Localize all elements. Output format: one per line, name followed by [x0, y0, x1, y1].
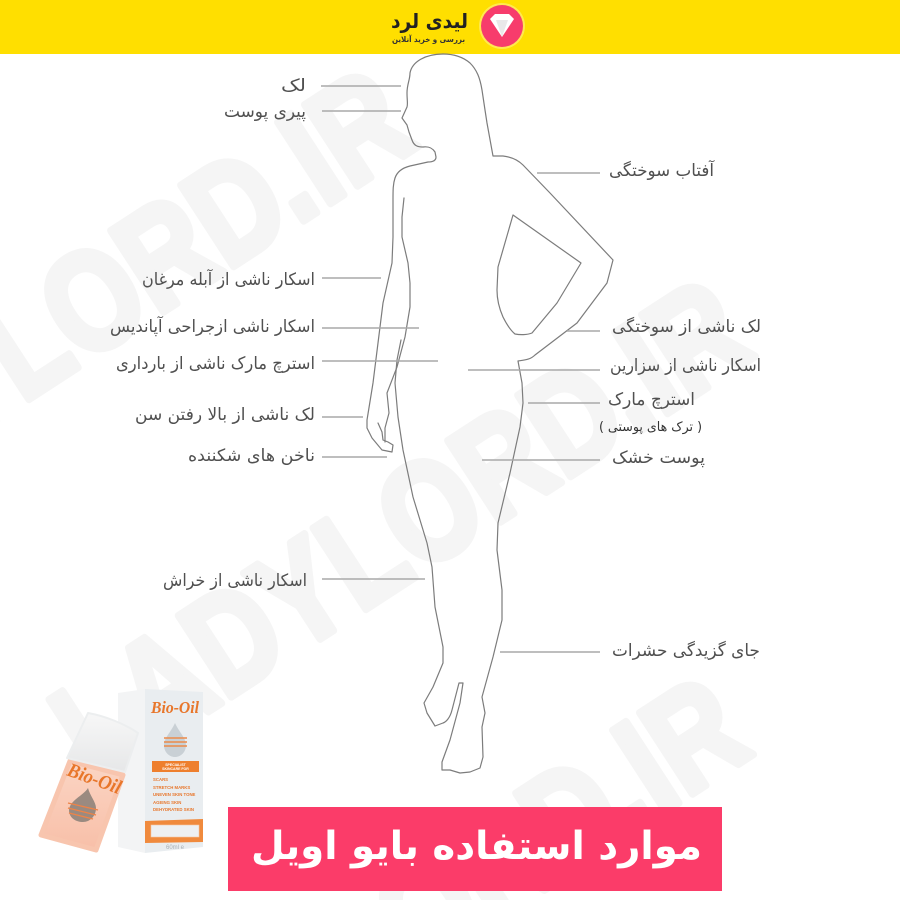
label: insect bites: جای گزیدگی حشرات: [612, 640, 760, 661]
label: scratch scars: اسکار ناشی از خراش: [163, 571, 307, 591]
product box: 60ml e: [166, 845, 185, 851]
label: skin cracks: ( ترک های پوستی ): [599, 420, 702, 435]
label: appendix surgery scars: اسکار ناشی ازجراحی آپاندیس: [110, 315, 315, 337]
label: brittle nails: ناخن های شکننده: [188, 446, 315, 466]
header logo icon: diamond in pink circle: [479, 3, 525, 49]
product bottle: [41, 713, 138, 850]
label: sunburn: آفتاب سوختگی: [609, 159, 715, 181]
header tagline: بررسی و خرید آنلاین: [392, 34, 465, 44]
label: burn spots: لک ناشی از سوختگی: [612, 316, 761, 337]
product box: SCARS: [153, 777, 168, 782]
label: caesarean scars: اسکار ناشی از سزارین: [610, 356, 761, 376]
product box: Bio-Oil: [150, 698, 199, 717]
label: stretch marks: استرچ مارک: [608, 390, 695, 410]
label: dry skin: پوست خشک: [612, 448, 705, 468]
product: Bio-Oil box and bottle: [41, 689, 203, 853]
label: age spots: لک ناشی از بالا رفتن سن: [135, 405, 315, 425]
label: pregnancy stretch marks: استرچ مارک ناشی از بارداری: [116, 354, 315, 374]
body silhouette outline: [367, 54, 613, 773]
banner title: موارد استفاده بایو اویل: [251, 824, 702, 869]
left callout labels: [110, 76, 315, 591]
label: skin aging: پیری پوست: [224, 102, 306, 122]
title banner: [228, 807, 722, 891]
product box: SKINCARE FOR: [162, 767, 189, 771]
header bar: [0, 0, 900, 54]
product box: STRETCH MARKS: [153, 785, 190, 790]
product bottle: Bio-Oil: [63, 759, 125, 799]
product box: SPECIALIST: [165, 763, 187, 767]
header brand name: لیدی لرد: [391, 9, 468, 33]
watermark layer: LADYLORD.IR: [26, 248, 774, 810]
product box: UNEVEN SKIN TONE: [153, 792, 196, 797]
product box: AGEING SKIN: [153, 800, 181, 805]
product box: DEHYDRATED SKIN: [153, 807, 194, 812]
product box: [118, 689, 203, 853]
label: chickenpox scars: اسکار ناشی از آبله مرغان: [142, 268, 315, 290]
callout leader lines: [321, 86, 600, 652]
right callout labels: [599, 159, 761, 661]
label: spots: لک: [281, 76, 306, 96]
